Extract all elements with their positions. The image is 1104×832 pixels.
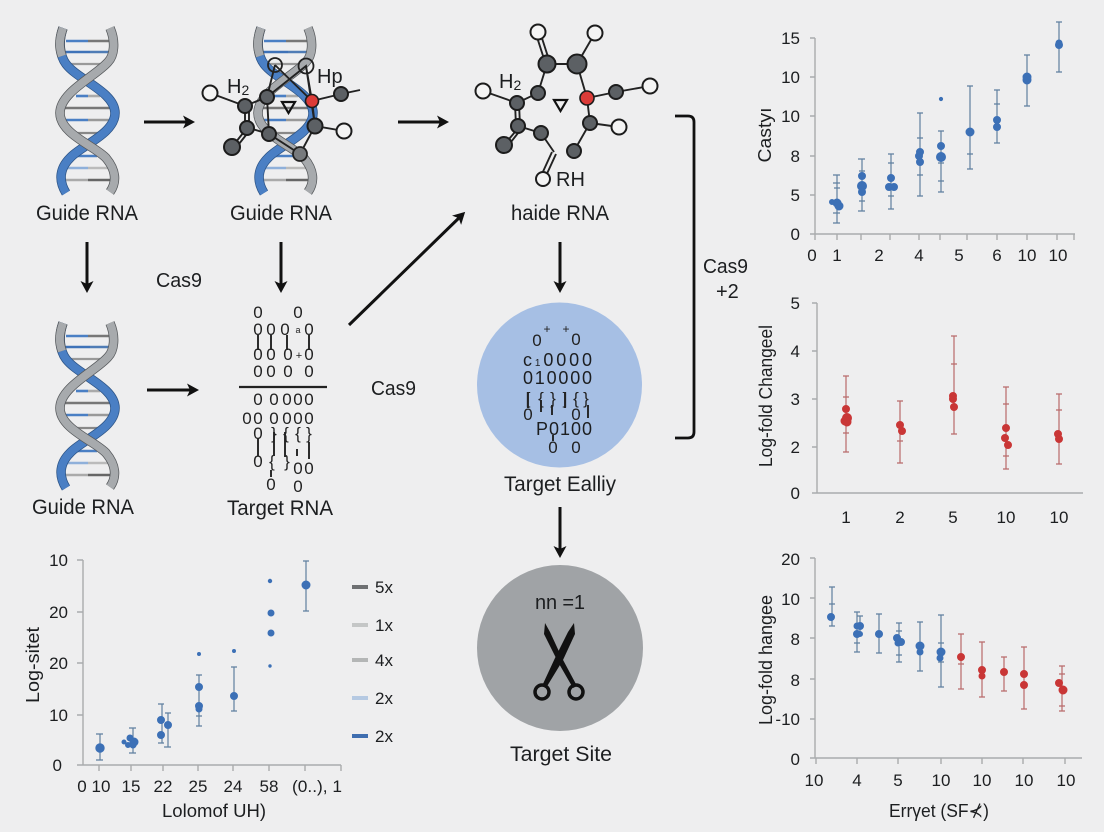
chart: lower left scatter: 58 [260, 777, 278, 796]
diagram: target RNA base pairs: 0 [304, 390, 314, 409]
panel: target cell blue circle: 0 [532, 331, 542, 350]
chart: middle right scatter: 5 [791, 294, 800, 313]
panel: target cell blue circle: P0100 [536, 419, 592, 439]
chart: lower left scatter: 25 [189, 777, 207, 796]
legend: 4x [375, 651, 393, 670]
panel: target cell blue circle: { [573, 389, 579, 408]
chart: middle right scatter: 4 [791, 342, 800, 361]
chart: lower left scatter: 15 [122, 777, 140, 796]
icon: DNA helix with bound molecule: 2 [241, 82, 249, 98]
arrow: centre to right molecule [398, 120, 446, 124]
chart: lower right scatter [756, 550, 1082, 821]
label: Guide RNA lower left: Guide RNA [32, 496, 134, 519]
diagram: target RNA base pairs: 0 [283, 362, 293, 381]
panel: target cell blue circle: 0 [571, 330, 581, 349]
label: haide RNA: haide RNA [511, 202, 609, 225]
label: Cas9 left: Cas9 [156, 270, 202, 292]
chart: lower left scatter: 0 [53, 756, 62, 775]
chart: top right scatter: 1 [832, 246, 842, 265]
chart: lower right scatter: 5 [893, 771, 903, 790]
bracket [675, 116, 694, 438]
chart: top right scatter: 10 [1018, 246, 1036, 265]
chart: lower left scatter: 20 [49, 654, 68, 673]
panel: target cell blue circle: + [562, 322, 570, 336]
diagram: target RNA base pairs: } [306, 424, 312, 443]
chart: lower right scatter: 10 [805, 771, 823, 790]
label: Cas9 +2: +2 [716, 281, 739, 303]
chart: lower right scatter: Log-fold hangee [756, 595, 776, 725]
label: Cas9 +2: Cas9 [703, 256, 748, 278]
label: Guide RNA top left: Guide RNA [36, 202, 138, 225]
chart: top right scatter: Castyı [755, 108, 775, 162]
chart: top right scatter: 2 [874, 246, 884, 265]
diagram: target RNA base pairs: 0 [253, 452, 263, 471]
diagram: target RNA base pairs: 0 [266, 362, 276, 381]
chart: lower right scatter: 10 [1015, 771, 1033, 790]
panel: target cell blue circle: ] [563, 389, 567, 408]
chart: middle right scatter: 2 [791, 438, 800, 457]
diagram: target RNA base pairs: } [284, 452, 290, 471]
legend: 1x [375, 616, 393, 635]
diagram: target RNA base pairs: + [296, 350, 302, 362]
chart: top right scatter: 0 [807, 246, 817, 265]
panel: target cell blue circle: { [538, 389, 544, 408]
panel: target cell blue circle: + [543, 322, 551, 336]
arrow: lower helix to target RNA [147, 388, 196, 392]
chart: lower left scatter: 20 [49, 603, 68, 622]
chart: top right scatter [755, 22, 1075, 265]
arrow: diagonal to haide RNA [349, 214, 463, 325]
label: Cas9 +2 [703, 256, 748, 303]
chart: lower right scatter: 8 [791, 630, 800, 649]
diagram: target RNA base pairs: 0 [269, 409, 279, 428]
chart: lower right scatter: 10 [1057, 771, 1075, 790]
chart: lower left scatter: Log-sitet [23, 627, 43, 703]
diagram: target RNA base pairs: 0 [304, 345, 314, 364]
icon: scissors [535, 623, 583, 699]
chart: top right scatter: 0 [791, 225, 800, 244]
chart: top right scatter: 10 [1049, 246, 1067, 265]
chart: lower right scatter: Errγet (SF⊀) [889, 801, 989, 821]
diagram: target RNA base pairs: 0 [253, 409, 263, 428]
arrow: down to target site [558, 507, 562, 555]
legend [352, 578, 393, 746]
panel: target cell blue circle: [ [526, 389, 531, 408]
icon: DNA helix top left [60, 28, 115, 193]
panel: target site gray circle: nn =1 [535, 592, 585, 614]
diagram: target RNA base pairs: 0 [293, 390, 303, 409]
diagram: target RNA base pairs: a [295, 325, 301, 335]
chart: lower right scatter: 10 [973, 771, 991, 790]
panel: target cell blue circle: } [583, 389, 589, 408]
chart: lower left scatter: 0 [77, 777, 87, 796]
chart: lower right scatter: 10 [781, 590, 800, 609]
diagram: target RNA base pairs: 0 [304, 362, 314, 381]
diagram: target RNA base pairs: { [269, 452, 275, 471]
chart: lower right scatter: 0 [791, 750, 800, 769]
panel: target cell blue circle: 010000 [523, 368, 592, 388]
diagram: target RNA base pairs: 0 [242, 409, 252, 428]
diagram: target RNA base pairs: 0 [293, 477, 303, 496]
panel: target cell blue circle: 0 [571, 405, 581, 424]
icon: molecule structure: RH [556, 169, 585, 191]
diagram: target RNA base pairs: 0 [253, 362, 263, 381]
chart: top right scatter: 10 [781, 107, 800, 126]
diagram: target RNA base pairs: } [271, 424, 277, 443]
chart: middle right scatter [756, 294, 1083, 527]
chart: middle right scatter: 1 [841, 508, 851, 527]
diagram: target RNA base pairs: 0 [304, 459, 314, 478]
icon: molecule structure: H [499, 71, 513, 93]
diagram: target RNA base pairs: { [295, 424, 301, 443]
arrow: left helix down [86, 242, 88, 290]
panel: target cell blue circle [477, 302, 642, 468]
chart: lower left scatter [23, 551, 342, 821]
legend: 2x [375, 727, 393, 746]
arrow: centre down [280, 242, 282, 290]
diagram: target RNA base pairs: 0 [283, 345, 293, 364]
chart: lower right scatter: 20 [781, 550, 800, 569]
chart: top right scatter: 8 [791, 147, 800, 166]
diagram: target RNA base pairs: 0 [253, 424, 263, 443]
chart: middle right scatter: 0 [791, 484, 800, 503]
legend: 2x [375, 689, 393, 708]
diagram: target RNA base pairs: 0 [304, 320, 314, 339]
chart: middle right scatter: 10 [1050, 508, 1068, 527]
chart: lower right scatter: 10 [932, 771, 950, 790]
diagram: target RNA base pairs: 0 [293, 409, 303, 428]
legend: 5x [375, 578, 393, 597]
chart: lower left scatter: Lolomof UH) [162, 801, 266, 821]
arrow: top left to centre [144, 120, 192, 124]
panel: target cell blue circle: } [550, 389, 556, 408]
chart: lower right scatter: 4 [852, 771, 862, 790]
diagram: target RNA base pairs: 0 [282, 390, 292, 409]
diagram: target RNA base pairs: { [283, 424, 289, 443]
diagram: target RNA base pairs: 0 [253, 390, 263, 409]
chart: middle right scatter: 5 [948, 508, 958, 527]
label: Target RNA: Target RNA [227, 497, 333, 520]
chart: top right scatter: 6 [992, 246, 1002, 265]
chart: middle right scatter: 10 [997, 508, 1015, 527]
diagram: target RNA base pairs: 0 [269, 390, 279, 409]
chart: top right scatter: 15 [781, 29, 800, 48]
label: Target Site: Target Site [510, 743, 612, 766]
icon: molecule structure: 2 [513, 77, 521, 93]
chart: lower left scatter: 10 [92, 777, 110, 796]
icon: molecule structure [476, 24, 658, 191]
panel: target cell blue circle: 0 [548, 438, 558, 457]
diagram: target RNA base pairs: 0 [266, 320, 276, 339]
label: Target Eallly: Target Ealliy [504, 473, 616, 496]
diagram: target RNA base pairs: 0 [304, 409, 314, 428]
chart: top right scatter: 10 [781, 68, 800, 87]
label: Cas9 centre: Cas9 [371, 378, 416, 400]
diagram: target RNA base pairs: 0 [253, 320, 263, 339]
chart: top right scatter: 5 [791, 186, 800, 205]
chart: lower left scatter: 10 [49, 551, 68, 570]
chart: lower right scatter: 8 [791, 671, 800, 690]
chart: lower left scatter: 22 [154, 777, 172, 796]
diagram: target RNA base pairs [239, 303, 327, 496]
panel: target cell blue circle: c 10000 [523, 350, 592, 370]
diagram: target RNA base pairs: 0 [280, 320, 290, 339]
chart: top right scatter: 5 [954, 246, 964, 265]
label: Guide RNA top centre: Guide RNA [230, 202, 332, 225]
diagram: target RNA base pairs: 0 [293, 303, 303, 322]
diagram: target RNA base pairs: 0 [253, 345, 263, 364]
chart: lower left scatter: 24 [224, 777, 242, 796]
chart: top right scatter: 4 [914, 246, 924, 265]
chart: middle right scatter: Log-fold Changeel [756, 325, 776, 467]
icon: DNA helix lower left [60, 323, 115, 488]
arrow: right molecule down [558, 242, 562, 290]
icon: DNA helix with bound molecule: H [227, 76, 241, 98]
chart: lower left scatter: 10 [49, 706, 68, 725]
diagram: target RNA base pairs: 0 [266, 475, 276, 494]
chart: middle right scatter: 3 [791, 390, 800, 409]
diagram: target RNA base pairs: 0 [253, 303, 263, 322]
diagram: target RNA base pairs: 0 [293, 459, 303, 478]
panel: target cell blue circle: 0 [523, 405, 533, 424]
diagram: target RNA base pairs: 0 [266, 345, 276, 364]
diagram: target RNA base pairs: 0 [282, 409, 292, 428]
panel: target site gray circle [477, 565, 643, 731]
panel: target cell blue circle: 0 [571, 438, 581, 457]
icon: DNA helix with bound molecule: Hp [317, 66, 343, 88]
chart: middle right scatter: 2 [895, 508, 905, 527]
chart: lower right scatter: -10 [775, 710, 800, 729]
chart: lower left scatter: (0..), 1 [292, 777, 342, 796]
icon: DNA helix with bound molecule [202, 28, 360, 193]
